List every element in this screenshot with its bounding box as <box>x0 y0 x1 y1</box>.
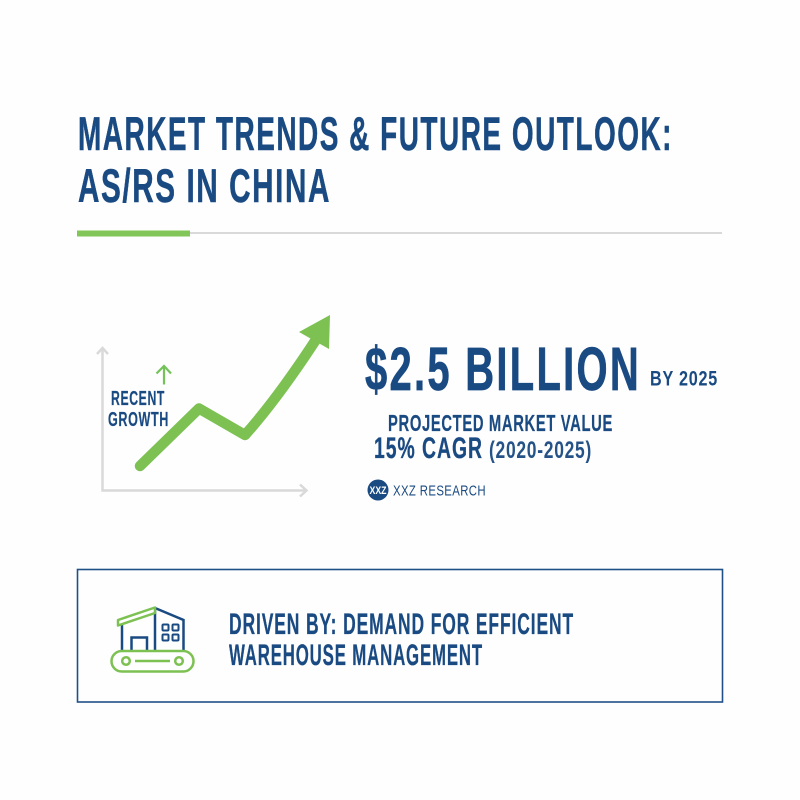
line chart: recent growth <box>97 315 330 496</box>
windows <box>162 624 178 640</box>
source logo: XXZ <box>370 485 387 497</box>
projected market value: PROJECTED MARKET VALUE <box>388 410 613 436</box>
small up arrow <box>156 366 171 384</box>
icon: warehouse on conveyor <box>112 608 194 672</box>
recent growth label: RECENT <box>111 388 165 410</box>
growth trend arrow <box>140 315 330 466</box>
recent growth label: GROWTH <box>108 409 169 431</box>
recent growth label <box>108 388 169 431</box>
source: xxz research <box>368 480 486 500</box>
title <box>78 107 673 212</box>
conveyor belt <box>112 651 194 672</box>
title: AS/RS IN CHINA <box>78 159 331 212</box>
chart axes <box>97 348 306 496</box>
door <box>132 638 147 650</box>
panel: drivers <box>78 570 722 702</box>
cagr: 15% CAGR <box>374 432 483 465</box>
building <box>122 608 184 650</box>
by 2025: BY 2025 <box>650 368 718 390</box>
roof <box>118 608 155 626</box>
driver text <box>229 608 574 672</box>
big value: $2.5 BILLION <box>365 335 641 403</box>
title divider <box>77 230 722 236</box>
cagr: (2020-2025) <box>489 437 592 464</box>
source name: XXZ RESEARCH <box>393 482 486 500</box>
driver text: WAREHOUSE MANAGEMENT <box>229 639 483 672</box>
market value stat <box>365 335 718 465</box>
